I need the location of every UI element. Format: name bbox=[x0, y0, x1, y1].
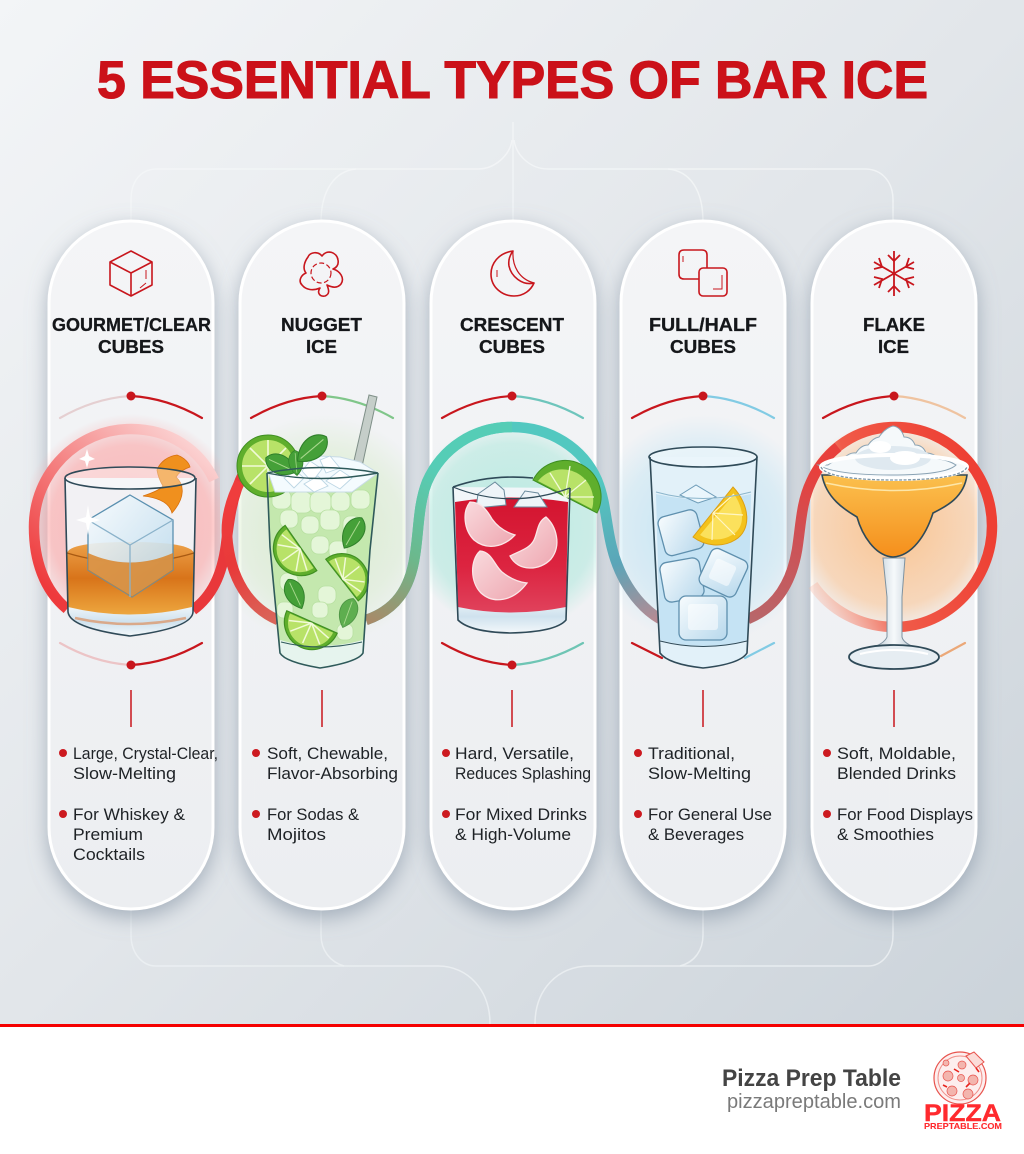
arcs: panel 3 bbox=[442, 392, 583, 670]
bullets: full/half cubes: & Beverages bbox=[648, 825, 744, 844]
panel: nugget ice bbox=[240, 221, 404, 909]
icon: snowflake bbox=[874, 251, 914, 296]
bullets: nugget ice: Soft, Chewable, bbox=[267, 744, 388, 763]
heading: nugget ice bbox=[281, 314, 363, 357]
icon: crescent bbox=[491, 251, 534, 296]
bullets: flake ice: Blended Drinks bbox=[837, 764, 956, 783]
bullets: nugget ice: Mojitos bbox=[267, 825, 326, 844]
glow: orange bbox=[811, 432, 977, 622]
glow: teal bbox=[430, 432, 596, 610]
heading: flake ice: ICE bbox=[878, 336, 909, 357]
footer brand text: Pizza Prep Table bbox=[722, 1065, 901, 1092]
heading: gourmet/clear cubes: GOURMET/CLEAR bbox=[52, 314, 211, 335]
icon: cube bbox=[110, 251, 152, 296]
tick: panel 2 bbox=[321, 690, 323, 727]
heading: flake ice bbox=[863, 314, 925, 357]
bullets: gourmet/clear cubes: For Whiskey & bbox=[73, 805, 186, 824]
bullets: gourmet/clear cubes: Premium bbox=[73, 825, 143, 844]
footer red rule bbox=[0, 1024, 1024, 1027]
drink: whiskey on the rocks bbox=[65, 449, 196, 636]
footer background bbox=[0, 1027, 1024, 1154]
panel: full/half cubes bbox=[621, 221, 785, 909]
tick: panel 5 bbox=[893, 690, 895, 727]
heading: crescent cubes: CUBES bbox=[479, 336, 545, 357]
bullets: crescent cubes: & High-Volume bbox=[455, 825, 571, 844]
heading: flake ice: FLAKE bbox=[863, 314, 925, 335]
bullets: crescent cubes: For Mixed Drinks bbox=[455, 805, 587, 824]
heading: full/half cubes bbox=[649, 314, 757, 357]
heading: nugget ice: NUGGET bbox=[281, 314, 363, 335]
heading: nugget ice: ICE bbox=[306, 336, 337, 357]
arcs: panel 5 bbox=[823, 392, 965, 656]
bullets: crescent cubes bbox=[442, 744, 591, 844]
drink: margarita with flake ice bbox=[818, 426, 967, 669]
tick: panel 1 bbox=[130, 690, 132, 727]
heading: crescent cubes bbox=[460, 314, 565, 357]
connector lines: top tree bbox=[131, 122, 893, 222]
heading: full/half cubes: CUBES bbox=[670, 336, 736, 357]
bullets: flake ice: Soft, Moldable, bbox=[837, 744, 956, 763]
ribbon: wave linking the five drinks bbox=[34, 427, 992, 627]
bullets: gourmet/clear cubes: Slow-Melting bbox=[73, 764, 176, 783]
heading: crescent cubes: CRESCENT bbox=[460, 314, 565, 335]
footer brand text: pizzapreptable.com bbox=[727, 1091, 901, 1113]
bullets: flake ice: & Smoothies bbox=[837, 825, 934, 844]
bullets: full/half cubes: For General Use bbox=[648, 805, 772, 824]
glow: blue bbox=[620, 428, 786, 612]
bullets: crescent cubes: Reduces Splashing bbox=[455, 764, 591, 783]
heading: full/half cubes: FULL/HALF bbox=[649, 314, 757, 335]
bullets: crescent cubes: Hard, Versatile, bbox=[455, 744, 574, 763]
bullets: nugget ice bbox=[252, 744, 398, 844]
icon: two cubes bbox=[679, 250, 727, 296]
arcs: panel 4 bbox=[632, 392, 774, 658]
glow: green bbox=[239, 429, 405, 614]
tick: panel 3 bbox=[511, 690, 513, 727]
bullets: full/half cubes bbox=[634, 744, 772, 844]
arcs: panel 2 bbox=[251, 392, 393, 418]
heading: gourmet/clear cubes: CUBES bbox=[98, 336, 164, 357]
bullets: gourmet/clear cubes: Cocktails bbox=[73, 845, 145, 864]
title: 5 ESSENTIAL TYPES OF BAR ICE bbox=[97, 51, 928, 110]
heading: gourmet/clear cubes bbox=[52, 314, 211, 357]
logo: wordmark: PREPTABLE.COM bbox=[924, 1121, 1002, 1131]
drink: mojito bbox=[237, 395, 379, 668]
drink: crescent ice red cocktail bbox=[453, 461, 601, 633]
bullets: gourmet/clear cubes bbox=[59, 744, 218, 864]
tick: panel 4 bbox=[702, 690, 704, 727]
bullets: full/half cubes: Slow-Melting bbox=[648, 764, 751, 783]
arcs: panel 1 bbox=[60, 392, 202, 670]
logo: wordmark: PIZZA bbox=[924, 1100, 1001, 1127]
bullets: nugget ice: Flavor-Absorbing bbox=[267, 764, 398, 783]
drink: tall glass with cubes bbox=[649, 447, 757, 668]
connector lines: bottom tree bbox=[131, 908, 893, 1024]
footer brand text bbox=[722, 1065, 901, 1113]
panel: crescent cubes bbox=[431, 221, 595, 909]
bullets: flake ice: For Food Displays bbox=[837, 805, 973, 824]
icon: nugget bbox=[300, 252, 342, 296]
bullets: flake ice bbox=[823, 744, 973, 844]
bullets: nugget ice: For Sodas & bbox=[267, 805, 360, 824]
glow: red bbox=[30, 420, 220, 611]
panel: flake ice bbox=[812, 221, 976, 909]
logo: pizza bbox=[934, 1052, 986, 1104]
panel: gourmet/clear cubes bbox=[49, 221, 213, 909]
bullets: full/half cubes: Traditional, bbox=[648, 744, 735, 763]
bullets: gourmet/clear cubes: Large, Crystal-Clear, bbox=[73, 744, 218, 763]
